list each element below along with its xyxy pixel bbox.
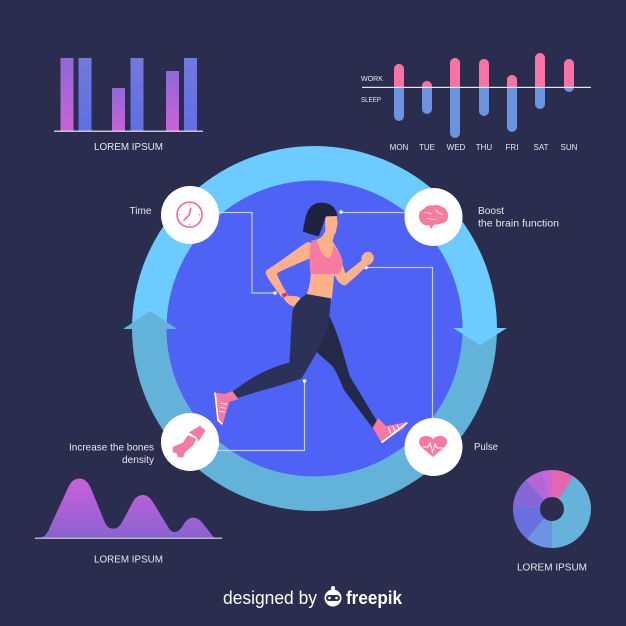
label: boost the brain function <box>478 205 559 230</box>
wristband <box>282 292 287 298</box>
donut chart: LOREM IPSUM <box>517 562 587 574</box>
label: increase the bones density: Increase the bones <box>69 442 154 454</box>
work and sleep chart <box>361 53 591 152</box>
icon circle: brain <box>404 188 462 246</box>
circular arrow ring <box>123 146 507 511</box>
icon: heart with pulse <box>419 436 447 457</box>
front shoe <box>373 418 407 443</box>
freepik credit <box>223 586 403 608</box>
icon: brain <box>419 205 448 229</box>
icon: clock <box>177 202 202 227</box>
label: boost the brain function: the brain function <box>478 218 559 230</box>
rear arm <box>266 242 312 297</box>
rear shoe <box>215 391 239 424</box>
freepik credit: designed by <box>223 588 317 608</box>
front arm <box>334 261 367 285</box>
arrowhead: left pointing up <box>123 311 177 329</box>
back leg <box>317 316 377 428</box>
connector lines <box>215 210 432 450</box>
hair <box>303 203 337 236</box>
skin: neck and torso <box>307 230 343 299</box>
work and sleep chart: THU <box>476 143 492 152</box>
icon circle: bones <box>161 413 219 471</box>
work and sleep chart: SLEEP <box>361 95 381 104</box>
label: increase the bones density: density <box>122 454 155 466</box>
icon circle: time <box>161 186 219 244</box>
bar chart: top left: LOREM IPSUM <box>94 141 163 153</box>
label: pulse: Pulse <box>474 441 498 453</box>
bar chart: top left <box>54 58 203 153</box>
area chart <box>35 479 222 566</box>
freepik credit: freepik <box>346 588 403 608</box>
work and sleep chart: SAT <box>534 143 549 152</box>
work and sleep chart: FRI <box>506 143 518 152</box>
work and sleep chart: SUN <box>561 143 578 152</box>
work and sleep chart: MON <box>390 143 409 152</box>
icon: freepik mascot <box>324 586 342 606</box>
icon circle: pulse <box>404 418 462 476</box>
label: increase the bones density <box>69 442 155 466</box>
fist <box>361 252 374 265</box>
area chart: LOREM IPSUM <box>94 554 163 566</box>
label: boost the brain function: Boost <box>478 205 504 217</box>
icon: bone joint <box>173 426 205 457</box>
running woman <box>215 203 407 443</box>
front leg <box>232 294 331 398</box>
work and sleep chart: WORK <box>361 74 383 83</box>
label: time: Time <box>130 205 152 217</box>
face <box>325 215 338 235</box>
work and sleep chart: TUE <box>419 143 435 152</box>
work and sleep chart: WED <box>447 143 466 152</box>
hand on hip <box>283 296 301 307</box>
donut chart <box>513 470 591 574</box>
arrowhead: right pointing down <box>453 328 507 345</box>
sports top <box>310 239 343 274</box>
